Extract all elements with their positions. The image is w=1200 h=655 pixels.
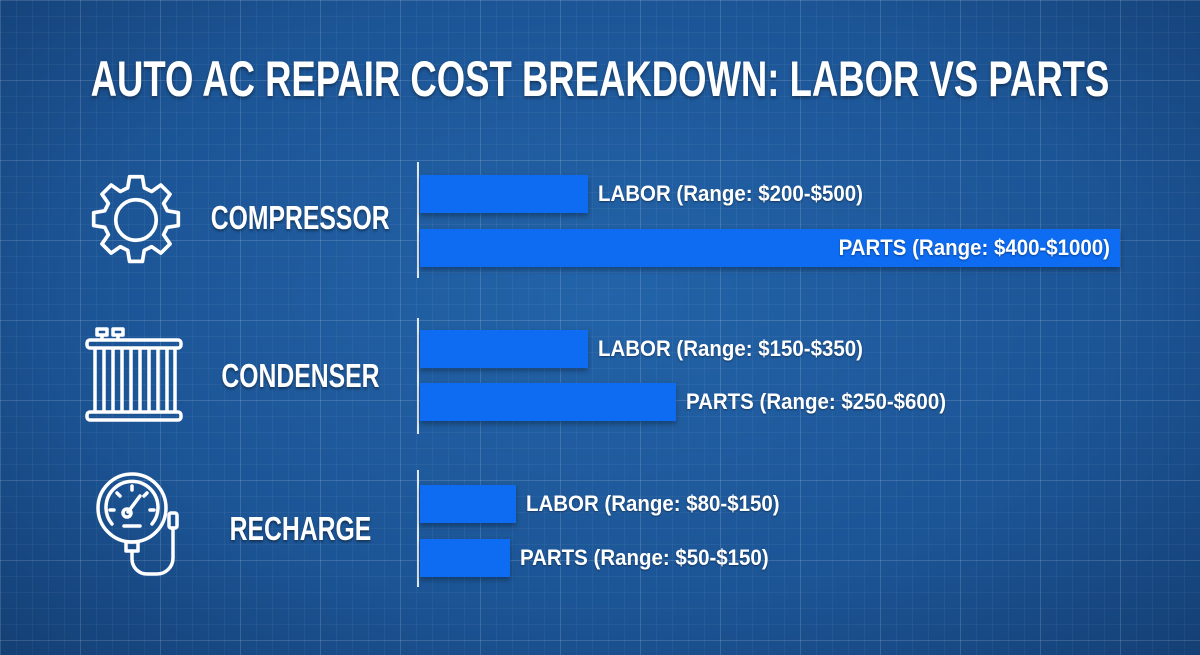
value: recharge parts: PARTS (Range: $50-$150) [520, 545, 769, 570]
bar: condenser parts [420, 383, 676, 421]
panel: compressor [92, 162, 1122, 278]
bar: compressor parts [420, 229, 1120, 267]
panel: recharge [96, 470, 780, 587]
bar: recharge parts [420, 539, 510, 577]
value: compressor parts: PARTS (Range: $400-$1000) [839, 235, 1110, 260]
bar: condenser labor [420, 330, 588, 368]
label: recharge: RECHARGE [229, 510, 371, 547]
value: condenser labor: LABOR (Range: $150-$350) [598, 336, 863, 361]
panel: condenser [85, 318, 946, 434]
bar: compressor labor [420, 175, 588, 213]
icon: condenser [85, 327, 183, 422]
icon: gear [92, 174, 180, 264]
label: condenser: CONDENSER [221, 357, 379, 394]
value: compressor labor: LABOR (Range: $200-$500) [598, 181, 863, 206]
bar: recharge labor [420, 485, 516, 523]
axis [417, 318, 419, 434]
axis [417, 470, 419, 587]
value: condenser parts: PARTS (Range: $250-$600) [686, 389, 946, 414]
title: AUTO AC REPAIR COST BREAKDOWN: LABOR VS PARTS [91, 51, 1109, 107]
axis [417, 162, 419, 278]
label: compressor: COMPRESSOR [211, 199, 389, 236]
value: recharge labor: LABOR (Range: $80-$150) [526, 491, 780, 516]
icon: gauge [96, 472, 179, 576]
